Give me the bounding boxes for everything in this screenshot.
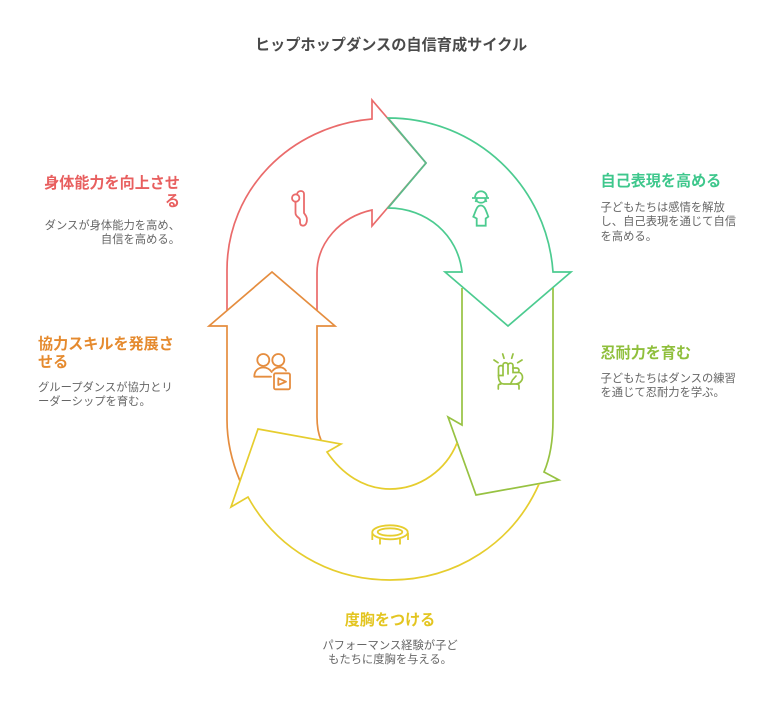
icon: group with video — [254, 354, 290, 389]
heading: confidence: 度胸をつける — [345, 612, 435, 629]
heading: physical ability: る — [165, 192, 180, 210]
heading: physical ability: 身体能力を向上させ — [44, 174, 180, 192]
description: physical ability — [45, 219, 180, 246]
text block: self-expression — [600, 172, 736, 243]
description: self-expression: を高める。 — [600, 231, 657, 243]
description: patience: を通じて忍耐力を学ぶ。 — [600, 387, 725, 399]
heading: collaboration: 協力スキルを発展さ — [38, 336, 174, 353]
icon: body flexibility — [292, 191, 307, 226]
arrow: physical ability (red) — [227, 100, 426, 310]
icon: trampoline — [372, 525, 408, 544]
text block: physical ability — [44, 174, 180, 246]
text block: patience — [600, 344, 736, 399]
text block: collaboration — [38, 336, 174, 408]
description: collaboration: グループダンスが協力とリ — [38, 382, 173, 394]
description: self-expression: 子どもたちは感情を解放 — [600, 202, 725, 214]
heading: self-expression: 自己表現を高める — [600, 173, 721, 190]
heading: collaboration: せる — [38, 354, 68, 371]
arrow: confidence (yellow) — [231, 429, 539, 580]
description: self-expression: し、自己表現を通じて自信 — [600, 216, 736, 228]
icon: child with hat — [472, 191, 489, 226]
description: patience — [600, 372, 736, 399]
description: physical ability: 自信を高める。 — [101, 234, 180, 246]
description: self-expression — [600, 201, 736, 243]
description: collaboration: ーダーシップを育む。 — [38, 396, 151, 408]
title: ヒップホップダンスの自信育成サイクル — [255, 37, 527, 54]
arrow: collaboration (orange) — [209, 272, 335, 481]
arrow: patience (lime) — [448, 288, 559, 495]
description: confidence: もたちに度胸を与える。 — [328, 654, 452, 666]
arrow: self-expression (green) — [388, 118, 571, 326]
heading: collaboration — [38, 336, 174, 371]
icon: fist — [494, 354, 522, 389]
description: confidence: パフォーマンス経験が子ど — [322, 640, 458, 652]
description: collaboration — [38, 381, 173, 408]
heading: patience: 忍耐力を育む — [600, 345, 691, 362]
heading: physical ability — [44, 174, 180, 210]
text block: confidence — [322, 612, 458, 666]
description: patience: 子どもたちはダンスの練習 — [600, 373, 736, 385]
description: physical ability: ダンスが身体能力を高め、 — [45, 220, 180, 232]
description: confidence — [322, 639, 458, 666]
